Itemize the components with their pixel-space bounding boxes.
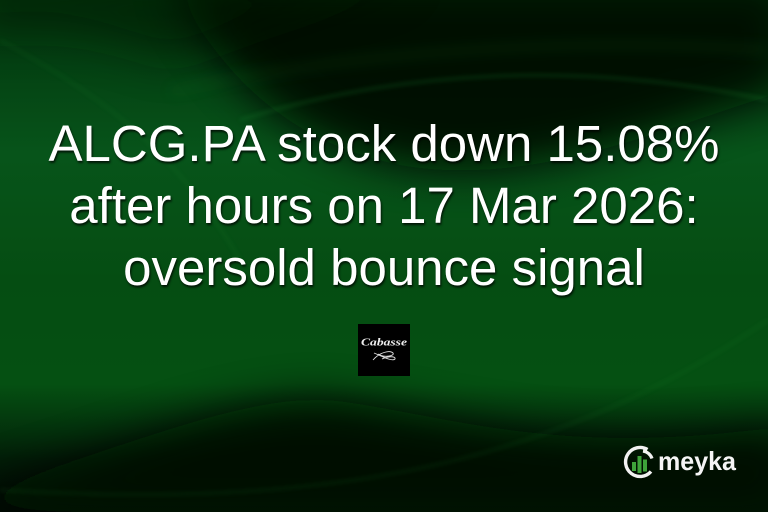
title: oversold bounce signal	[123, 239, 645, 296]
wordmark: meyka	[658, 446, 737, 476]
icon: meyka ring with bars	[626, 447, 652, 476]
icon: Cabasse company logo	[358, 324, 410, 376]
title: after hours on 17 Mar 2026:	[69, 177, 699, 234]
title: ALCG.PA stock down 15.08%	[49, 115, 719, 172]
logo: meyka brand	[624, 446, 737, 478]
icon: Cabasse company logo: Cabasse	[361, 338, 408, 348]
title	[48, 115, 720, 298]
